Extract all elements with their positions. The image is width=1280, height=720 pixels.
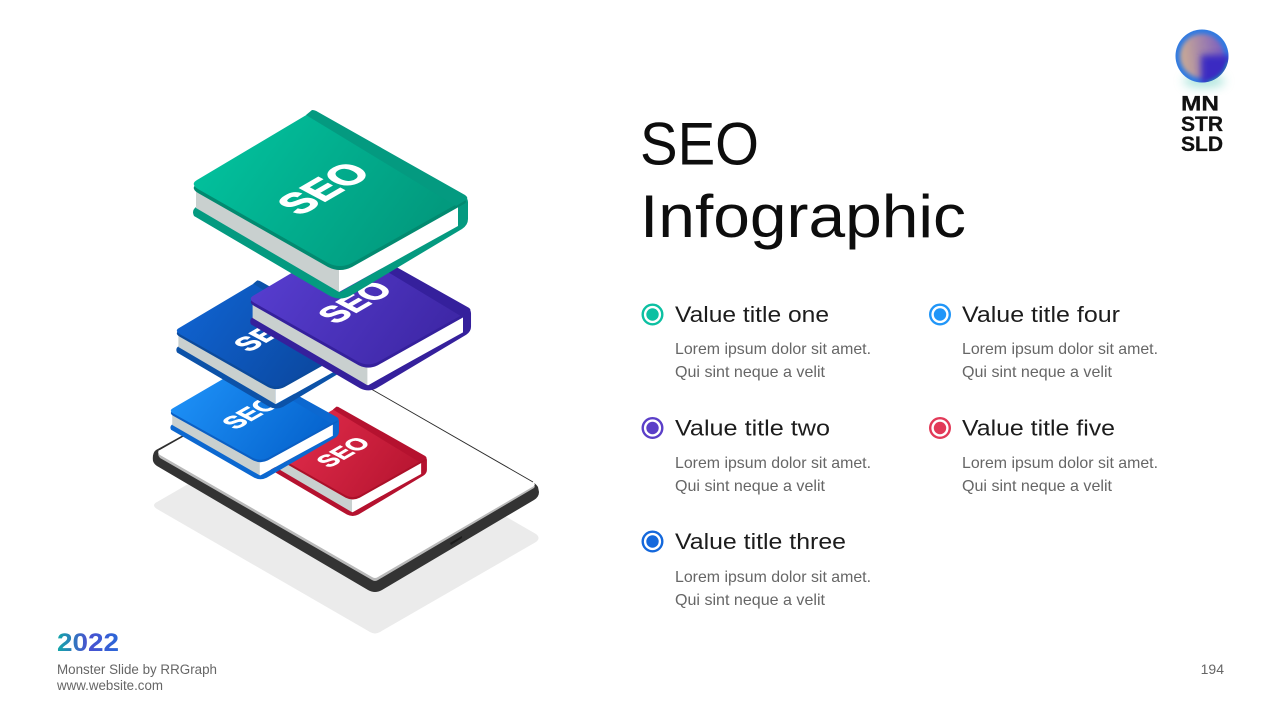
- icon: purple bullet: [643, 418, 662, 438]
- title: SEO: [640, 110, 759, 178]
- icon: red bullet: [930, 418, 950, 438]
- page number: 194: [1201, 661, 1224, 677]
- text: value three description: Qui sint neque a velit: [675, 592, 826, 609]
- text: value four description: Lorem ipsum dolor sit amet.: [962, 341, 1158, 358]
- heading: value title one: Value title one: [675, 302, 829, 327]
- book: green: SEO: [266, 156, 381, 221]
- heading: value title three: Value title three: [675, 529, 846, 554]
- wordmark: [1181, 92, 1223, 156]
- text: value five description: [962, 455, 1158, 495]
- icon: sphere: [1176, 30, 1231, 88]
- text: value two description: Qui sint neque a velit: [675, 478, 826, 495]
- value item two: [643, 416, 871, 495]
- book: green: [193, 110, 468, 298]
- text: value five description: Lorem ipsum dolor sit amet.: [962, 455, 1158, 472]
- text: value two description: Lorem ipsum dolor sit amet.: [675, 455, 871, 472]
- icon: teal bullet: [643, 305, 662, 324]
- wordmark: SLD: [1181, 133, 1223, 156]
- value item five: [930, 416, 1158, 495]
- heading: value title five: Value title five: [962, 416, 1115, 440]
- book: red: SEO: [311, 434, 377, 471]
- value item one: [643, 302, 871, 381]
- footer: year: 2022: [57, 629, 119, 657]
- footer: credits: [56, 662, 217, 693]
- logo: [1176, 30, 1231, 156]
- value item four: [930, 302, 1158, 381]
- text: value five description: Qui sint neque a velit: [962, 478, 1113, 495]
- footer: credits: www.website.com: [56, 678, 163, 693]
- text: value three description: [675, 569, 871, 609]
- tablet: [153, 359, 539, 592]
- book: purple: [250, 240, 471, 390]
- text: value one description: Lorem ipsum dolor sit amet.: [675, 341, 871, 358]
- title: Infographic: [640, 183, 966, 250]
- book: bright blue: [170, 366, 339, 479]
- wordmark: MN: [1181, 92, 1219, 116]
- icon: bright blue bullet: [930, 305, 950, 324]
- book: bright blue: SEO: [216, 394, 286, 433]
- book: dark blue: [176, 280, 363, 409]
- illustration: SEO books on tablet: [153, 110, 539, 634]
- text: value two description: [675, 455, 871, 495]
- tablet shadow: [154, 410, 538, 634]
- text: value three description: Lorem ipsum dolor sit amet.: [675, 569, 871, 586]
- heading: value title two: Value title two: [675, 416, 830, 440]
- title: [640, 110, 966, 250]
- value item three: [643, 529, 871, 609]
- text: value four description: Qui sint neque a velit: [962, 364, 1113, 381]
- book: purple: SEO: [310, 277, 402, 328]
- text: value four description: [962, 341, 1158, 381]
- heading: value title four: Value title four: [962, 302, 1120, 327]
- footer: credits: Monster Slide by RRGraph: [57, 662, 217, 677]
- text: value one description: Qui sint neque a velit: [675, 364, 826, 381]
- icon: blue bullet: [643, 532, 662, 551]
- book: dark blue: SEO: [227, 312, 305, 356]
- text: value one description: [675, 341, 871, 381]
- book: red: [267, 407, 427, 516]
- wordmark: STR: [1181, 113, 1223, 136]
